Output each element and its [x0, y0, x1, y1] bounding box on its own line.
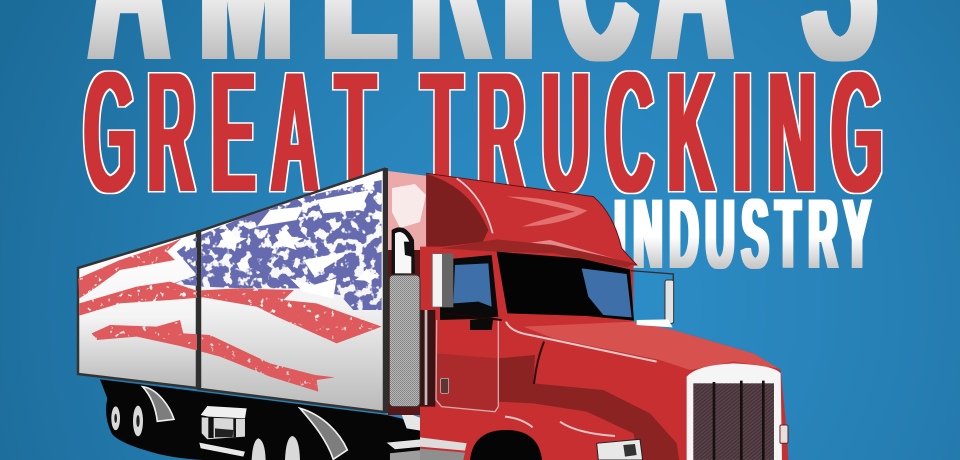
windshield glass — [582, 268, 632, 317]
visor — [440, 239, 635, 267]
door outline — [436, 318, 498, 412]
hood highlight — [523, 322, 778, 370]
wheel arch — [470, 430, 542, 460]
cab rear strip — [420, 310, 435, 407]
title: Great Trucking: GREAT TRUCKING — [84, 34, 883, 231]
rear fender — [143, 387, 174, 421]
trailer front panel — [200, 169, 384, 412]
hood vent — [534, 342, 544, 384]
fender — [465, 409, 637, 460]
grille mesh — [693, 383, 774, 460]
rear hubs — [111, 406, 143, 436]
fairing curve — [457, 178, 493, 233]
exhaust stack — [389, 227, 420, 407]
visor band — [480, 240, 637, 265]
door handle — [441, 378, 449, 393]
gap behind stack — [388, 250, 428, 415]
fairing shadow — [427, 174, 488, 260]
cab steps — [387, 410, 450, 460]
cab — [420, 239, 788, 460]
right mirror — [665, 280, 674, 323]
left mirror — [432, 253, 453, 307]
trailer seam and post — [197, 168, 388, 413]
cab body — [420, 240, 788, 460]
flag: stars — [217, 190, 380, 298]
title: Industry: INDUSTRY — [614, 179, 870, 289]
fairing — [427, 173, 637, 265]
fairing highlight — [507, 197, 587, 227]
trailer rear panel — [78, 232, 197, 388]
grille surround — [687, 363, 782, 460]
windshield — [497, 252, 634, 321]
flag artwork — [78, 180, 382, 392]
door shadow wave — [498, 355, 679, 460]
door shade — [437, 353, 498, 412]
flag: red stripes — [78, 238, 382, 392]
mirror arm — [631, 271, 673, 323]
door window — [440, 255, 498, 330]
drive hubs — [252, 436, 300, 460]
headlight — [597, 439, 643, 460]
nose white patch — [392, 184, 426, 228]
tail marker — [780, 425, 788, 443]
cab steps front — [420, 437, 467, 460]
hood trim — [506, 322, 657, 362]
chassis and wheels — [100, 379, 463, 460]
fuel tank — [199, 406, 247, 457]
trailer nose — [388, 171, 428, 262]
illustration: red semi truck — [78, 168, 788, 460]
drive fender — [300, 408, 347, 459]
flag: blue field — [173, 180, 382, 310]
grille bars — [713, 381, 765, 460]
door glass — [453, 263, 492, 307]
fender highlights — [505, 417, 615, 436]
mirror strut — [447, 313, 502, 320]
mirror base — [637, 319, 673, 327]
